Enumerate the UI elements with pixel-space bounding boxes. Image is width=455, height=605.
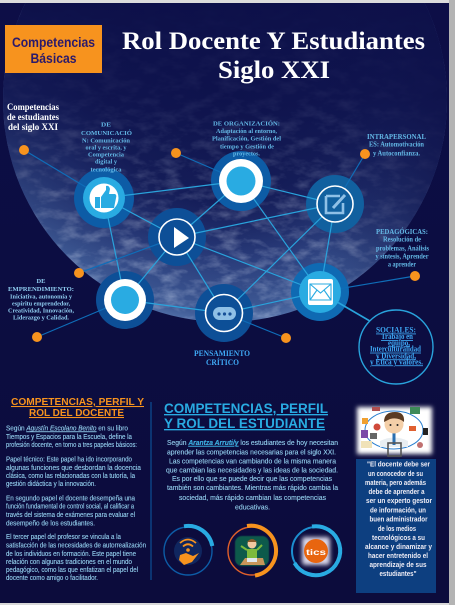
quote box: de los medios bbox=[378, 524, 416, 533]
text block: rol del docente: profesión docente, en torno a tres papeles básicos: bbox=[6, 442, 137, 449]
text block: rol del docente: clásica, como las relacionadas con la tutoría, la bbox=[6, 473, 135, 480]
label: sociales: Trabajo en bbox=[381, 332, 413, 341]
text block: rol del estudiante: Es por ello que se puede decir que las competencias bbox=[172, 474, 332, 483]
quote box bbox=[356, 459, 436, 593]
label: de organización: proyectos. bbox=[233, 151, 260, 158]
text block: rol del estudiante: también son cambiantes. Mientras más rápido cambia la bbox=[167, 483, 339, 492]
label: de emprendimiento: Liderazgo y Calidad. bbox=[13, 314, 69, 321]
label: intrapersonal: ES: Automotivación bbox=[369, 141, 424, 148]
label: competencias de estudiantes: Competencias bbox=[7, 102, 59, 112]
badge: Competencias Básicas: Competencias bbox=[12, 34, 95, 50]
network connecting lines bbox=[24, 150, 415, 338]
label: de organización: tiempo y Gestión de bbox=[220, 143, 274, 150]
quote box: buen administrador bbox=[370, 514, 428, 524]
label: de comunicación: N: Comunicación bbox=[82, 137, 130, 144]
earth globe bbox=[0, 0, 449, 325]
label: de comunicación: tecnológica bbox=[90, 166, 122, 173]
quote box: hacer entretenido el bbox=[368, 551, 428, 560]
orange connection dots bbox=[19, 145, 420, 343]
node: play bbox=[159, 219, 195, 255]
label: de comunicación bbox=[81, 122, 132, 173]
text block: rol del docente: Según Agustín Escolano Benito en su libro bbox=[6, 425, 128, 432]
divider bbox=[150, 402, 152, 580]
label: de comunicación: Competencia bbox=[88, 151, 125, 158]
label: pensamiento crítico bbox=[194, 349, 250, 367]
label: competencias de estudiantes: del siglo XXI bbox=[8, 122, 58, 132]
text block: rol del estudiante: que cambian las necesidades y las ideas de la sociedad. bbox=[166, 465, 338, 474]
label: de emprendimiento: DE bbox=[36, 278, 46, 285]
text block: rol del docente: función fundamental de control social, al calificar a bbox=[6, 503, 134, 510]
node: mail bbox=[299, 271, 341, 313]
text block: rol del docente: En segundo papel el docente desempeña una bbox=[6, 495, 135, 502]
node: edit bbox=[317, 186, 353, 222]
text block: rol del docente: pedagógico, como las que enfatizan el papel del bbox=[6, 567, 138, 574]
node: big blue ring bbox=[104, 279, 146, 321]
text block: rol del docente: desempeño de los estudiantes. bbox=[6, 520, 95, 527]
text block: rol del docente: relación con algunas tradiciones en el mundo bbox=[6, 559, 132, 566]
label: de comunicación: digital y bbox=[95, 159, 118, 166]
label: pensamiento crítico: CRÍTICO bbox=[206, 357, 239, 367]
label: de comunicación: DE bbox=[101, 122, 112, 128]
text block: rol del docente: algunas funciones que desbordan la docencia bbox=[6, 465, 141, 472]
quote box: de información, un bbox=[370, 506, 426, 514]
label: sociales: y Ética y valores. bbox=[370, 356, 423, 366]
icon: tics ring bbox=[292, 526, 340, 575]
text block: rol del estudiante: Las competencias van cambiando de la misma manera bbox=[169, 457, 337, 466]
text block: rol del estudiante: Según Arantza Arruti/y los estudiantes de hoy necesitan bbox=[167, 438, 338, 447]
label: intrapersonal: y Autoconfianza. bbox=[373, 150, 420, 157]
label: de emprendimiento: espíritu emprendedor, bbox=[12, 301, 70, 308]
label: sociales bbox=[370, 326, 423, 366]
image: teacher with technology icons bbox=[357, 407, 432, 456]
label: de organización: Adaptación al entorno, bbox=[216, 128, 277, 135]
badge: Competencias Básicas: Básicas bbox=[30, 50, 77, 66]
label: de comunicación: COMUNICACIÓ bbox=[81, 129, 132, 137]
icon: tics ring: tics bbox=[306, 548, 327, 557]
quote box: materia, pero además bbox=[365, 478, 426, 487]
label: de comunicación: oral y escrita, y bbox=[86, 144, 127, 151]
label: de emprendimiento: EMPRENDIMIENTO: bbox=[8, 286, 74, 293]
heading: perfil del estudiante: COMPETENCIAS, PERFIL bbox=[164, 401, 328, 416]
label: de emprendimiento bbox=[8, 278, 74, 321]
label: sociales: equipo, bbox=[388, 338, 410, 347]
title bbox=[122, 26, 425, 84]
node: thumbs up bbox=[83, 177, 125, 219]
text block: rol del docente: de los individuos en formación. Este papel tiene bbox=[6, 551, 136, 558]
heading: perfil del docente: ROL DEL DOCENTE bbox=[29, 408, 124, 419]
node: organization ring bbox=[219, 159, 263, 203]
quote box: estudiantes" bbox=[380, 569, 417, 578]
heading: perfil del estudiante bbox=[164, 401, 328, 431]
label: de organización: Planificación, Gestión del bbox=[212, 136, 281, 143]
node halos bbox=[74, 151, 364, 342]
quote box: "El docente debe ser bbox=[367, 460, 430, 468]
label: pedagógicas: PEDAGÓGICAS: bbox=[376, 228, 428, 236]
icon: student ring bbox=[228, 526, 276, 576]
label: pedagógicas bbox=[376, 228, 429, 268]
label: intrapersonal bbox=[367, 134, 426, 157]
label: pedagógicas: problemas, Análisis bbox=[376, 245, 429, 252]
text block: rol del docente: docente como amigo o facilitador. bbox=[6, 575, 98, 582]
text block: rol del estudiante: educativas. bbox=[235, 502, 270, 511]
label: competencias de estudiantes: de estudiantes bbox=[7, 112, 59, 122]
text block: rol del docente bbox=[6, 425, 146, 582]
label: pedagógicas: a aprender bbox=[388, 261, 416, 268]
heading: perfil del docente bbox=[11, 397, 144, 419]
title: Rol Docente Y Estudiantes bbox=[122, 26, 425, 55]
label: sociales: Interculturalidad bbox=[370, 345, 421, 354]
quote box: debe de aprender a bbox=[368, 487, 425, 496]
text block: rol del docente: Papel técnico: Este papel ha ido incorporando bbox=[6, 456, 132, 463]
title: Siglo XXI bbox=[218, 55, 330, 84]
quote box: tecnológicos a su bbox=[372, 533, 425, 542]
quote box: un conocedor de su bbox=[368, 469, 423, 478]
badge: Competencias Básicas bbox=[5, 25, 102, 73]
heading: perfil del estudiante: Y ROL DEL ESTUDIANTE bbox=[164, 416, 325, 431]
text block: rol del docente: través del sistema de exámenes para evaluar el bbox=[6, 512, 135, 519]
label: intrapersonal: INTRAPERSONAL bbox=[367, 134, 426, 141]
label: de emprendimiento: Iniciativa, autonomía y bbox=[10, 293, 73, 300]
quote box: ser un experto gestor bbox=[366, 496, 432, 505]
label: sociales: SOCIALES: bbox=[376, 326, 416, 334]
icon: wifi hand ring bbox=[164, 526, 212, 575]
sociales circle outline bbox=[359, 310, 433, 384]
label: pensamiento crítico: PENSAMIENTO bbox=[194, 349, 250, 358]
label: de organización bbox=[212, 120, 281, 158]
text block: rol del estudiante: sociedad, más rápido cambian las competencias bbox=[179, 493, 326, 502]
label: pedagógicas: y síntesis, Aprender bbox=[376, 253, 428, 260]
quote box: alcance y dinamizar y bbox=[365, 542, 433, 551]
label: de emprendimiento: Creatividad, Innovación, bbox=[8, 307, 74, 314]
text block: rol del estudiante bbox=[166, 438, 339, 511]
quote box: aprendizaje de sus bbox=[370, 560, 426, 569]
node: chat bbox=[206, 294, 242, 332]
text block: rol del docente: Tiempos y Espacios para la Escuela, define la bbox=[6, 434, 132, 441]
text block: rol del docente: gestión didáctica y la innovación. bbox=[6, 481, 96, 488]
label: de organización: DE ORGANIZACIÓN: bbox=[213, 120, 280, 128]
text block: rol del estudiante: aprender las competencias necesarias para el siglo XXI. bbox=[167, 447, 336, 456]
label: pedagógicas: Resolución de bbox=[383, 237, 421, 244]
text block: rol del docente: El tercer papel del profesor se vincula a la bbox=[6, 534, 121, 541]
label: competencias de estudiantes bbox=[7, 102, 59, 132]
heading: perfil del docente: COMPETENCIAS, PERFIL Y bbox=[11, 397, 144, 408]
text block: rol del docente: satisfacción de las necesidades de autorrealización bbox=[6, 542, 146, 549]
label: sociales: y Diversidad, bbox=[376, 351, 416, 360]
